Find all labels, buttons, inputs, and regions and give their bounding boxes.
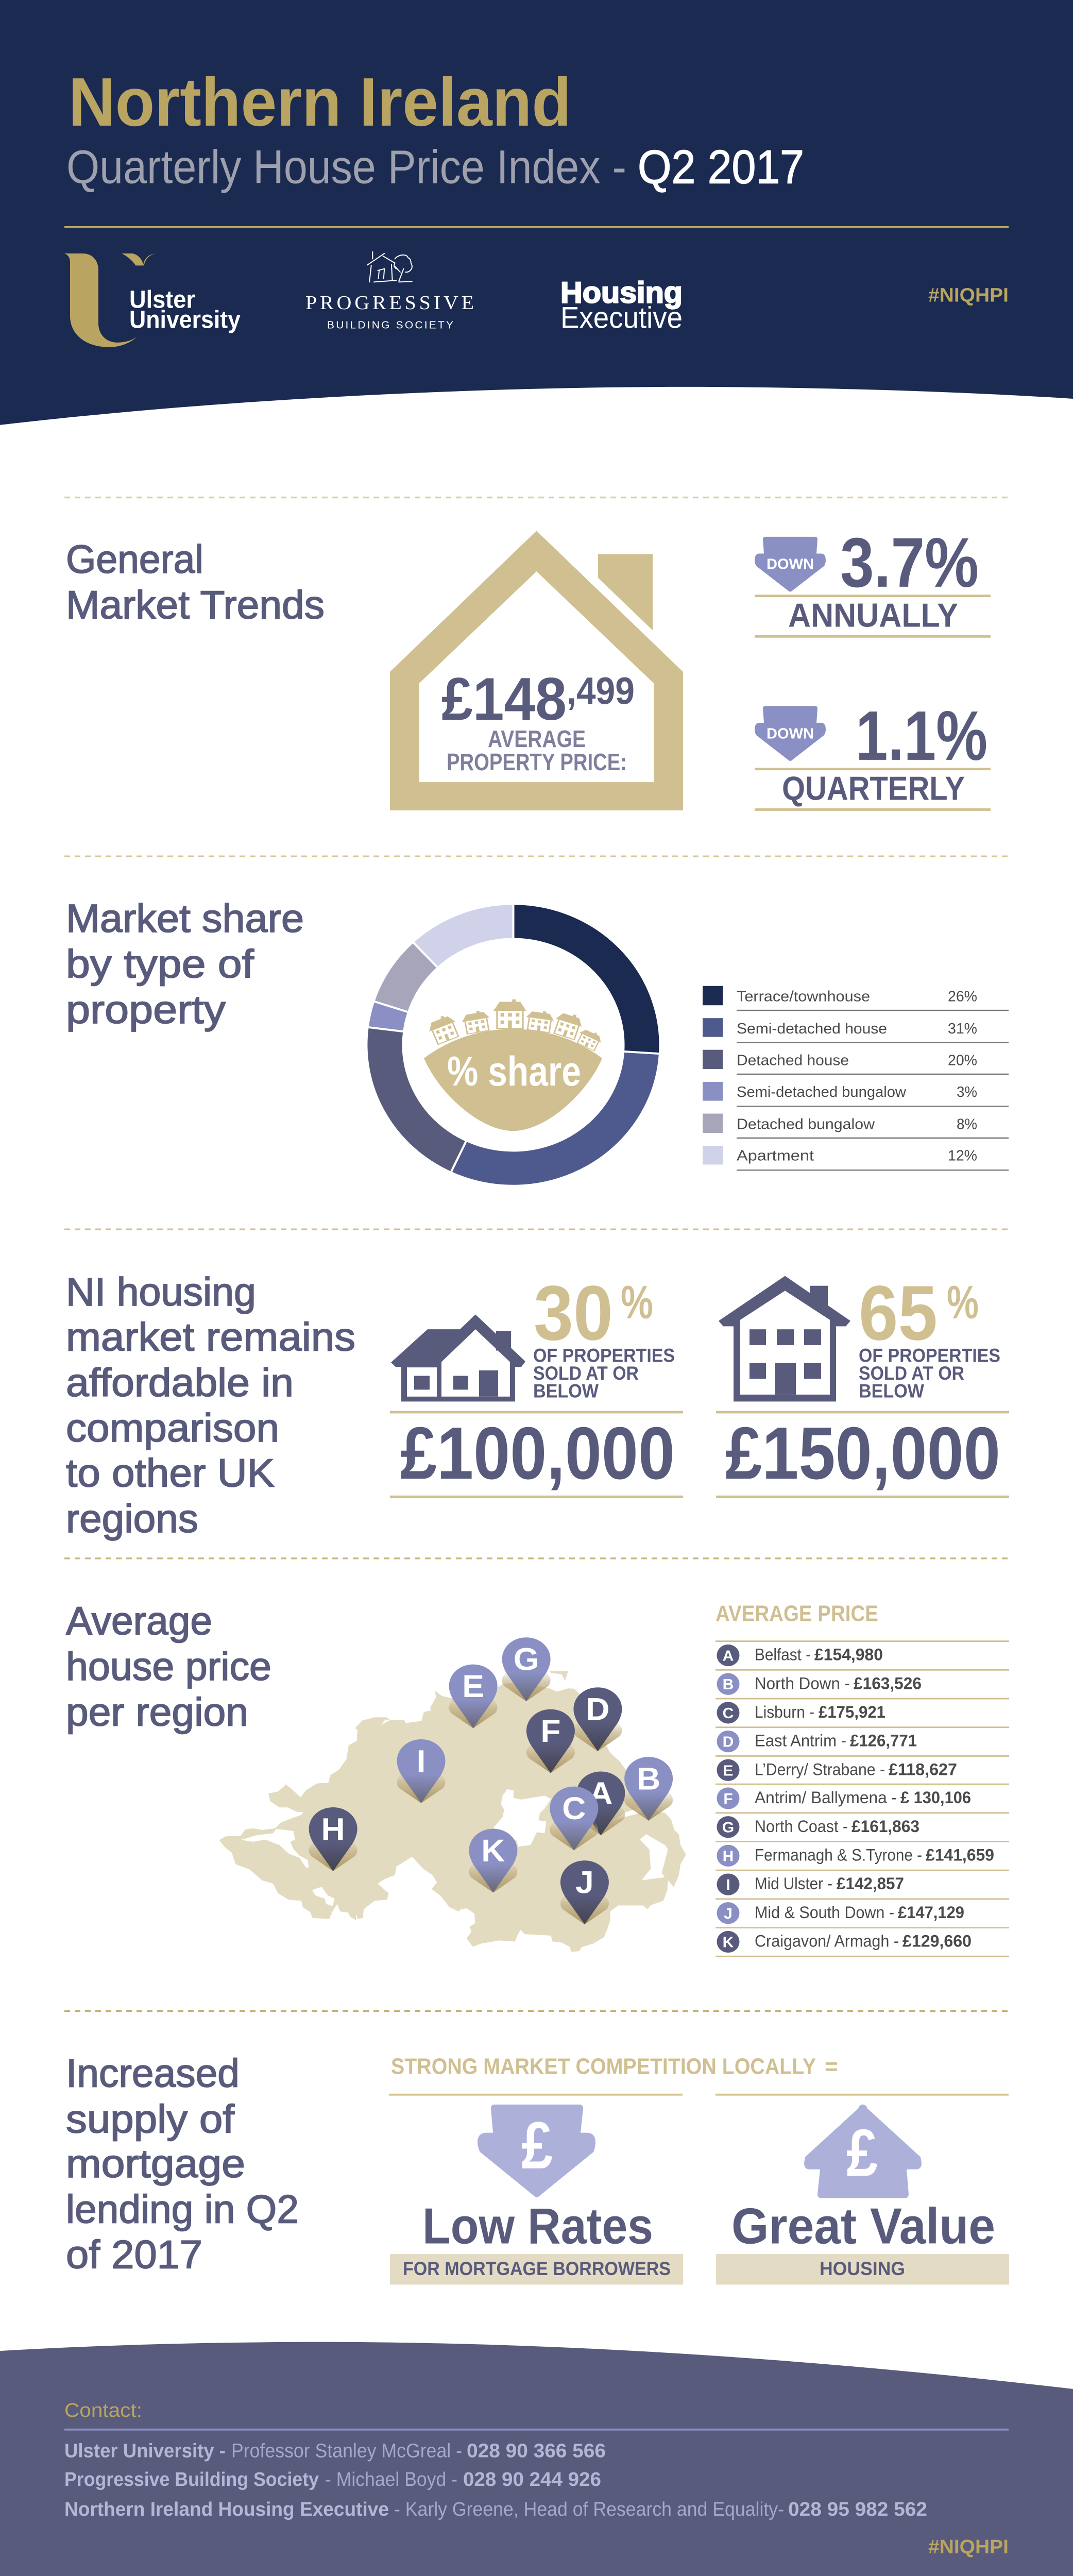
heading: house price: [66, 1644, 271, 1689]
heading: NI housing: [66, 1270, 256, 1314]
heading: [66, 896, 304, 1031]
quarterly change: 1.1%: [856, 697, 987, 775]
row: D East Antrim: East Antrim -: [755, 1732, 846, 1751]
logo: Housing Executive: Housing: [560, 277, 683, 309]
heading: [66, 1270, 355, 1541]
map pin: D: D: [586, 1692, 610, 1727]
great value: HOUSING: [820, 2258, 905, 2280]
logo: Ulster University: Ulster: [129, 286, 195, 313]
map pin: C: [550, 1787, 598, 1851]
row: A Belfast: A: [723, 1648, 734, 1664]
logo: Housing Executive: Executive: [560, 301, 683, 334]
heading: [66, 1599, 271, 1734]
heading: per region: [66, 1690, 248, 1734]
heading: lending in Q2: [66, 2187, 299, 2231]
row: H Fermanagh: £141,659: [926, 1846, 994, 1865]
map pin: H: [309, 1807, 357, 1871]
row: G North Coast: North Coast -: [755, 1817, 848, 1836]
map pin: G: G: [514, 1642, 539, 1677]
logo: Progressive Building Society: PROGRESSIVE: [305, 292, 474, 314]
footer panel: [0, 2342, 1073, 2576]
row: J Mid and South Down: £147,129: [898, 1903, 964, 1922]
price list: [716, 1602, 1009, 1957]
heading: Market Trends: [66, 583, 325, 627]
quarterly change: [755, 697, 991, 811]
row: I Mid Ulster: [717, 1873, 904, 1895]
title: Northern Ireland: [69, 63, 571, 140]
subtitle: Quarterly House Price Index -: [66, 140, 626, 193]
map pin: D: [573, 1687, 622, 1751]
heading: regions: [66, 1496, 198, 1541]
great value: Great Value: [731, 2198, 995, 2255]
row: C Lisburn: £175,921: [819, 1703, 885, 1722]
contact: Northern Ireland Housing Executive: [64, 2499, 927, 2520]
heading: property: [66, 987, 226, 1031]
legend: 3%: [957, 1083, 977, 1100]
icon: down arrow: DOWN: [767, 725, 814, 742]
logo: Progressive Building Society: BUILDING SOCIETY: [327, 319, 453, 331]
row: D East Antrim: [717, 1731, 917, 1752]
icon: down arrow: [755, 537, 826, 591]
row: B North Down: North Down -: [755, 1674, 850, 1693]
heading: mortgage: [66, 2141, 245, 2186]
heading: affordable in: [66, 1360, 294, 1404]
row: B North Down: [717, 1673, 922, 1695]
contact: Progressive Building Society: 028 90 244 926: [463, 2469, 601, 2490]
logo: Ulster University: University: [129, 307, 241, 333]
stat: 65% at £150,000: %: [947, 1276, 979, 1329]
stat: 30% at £100,000: OF PROPERTIES: [533, 1345, 675, 1366]
map pin: B: B: [637, 1761, 660, 1797]
row: E L'Derry Strabane: £118,627: [889, 1760, 957, 1779]
row: B North Down: B: [723, 1676, 734, 1693]
low rates: Low Rates: [422, 2198, 653, 2255]
panel: general market trends: [66, 523, 991, 811]
row: I Mid Ulster: £142,857: [837, 1875, 904, 1893]
stat: 65% at £150,000: [716, 1269, 1009, 1498]
stat: 65% at £150,000: BELOW: [859, 1380, 925, 1402]
row: A Belfast: £154,980: [814, 1646, 883, 1664]
icon: up arrow with pound: £: [846, 2116, 878, 2191]
contact: Northern Ireland Housing Executive: Northern Ireland Housing Executive: [64, 2499, 389, 2520]
row: K Craigavon Armagh: [717, 1931, 972, 1953]
heading: market remains: [66, 1315, 355, 1359]
heading: to other UK: [66, 1451, 275, 1495]
heading: comparison: [66, 1406, 279, 1450]
stat: 30% at £100,000: 30: [534, 1269, 613, 1357]
panel: regional prices: [66, 1599, 1009, 1957]
quarterly change: QUARTERLY: [782, 770, 965, 807]
centre: % share hill with houses: % share: [447, 1048, 581, 1094]
map pin: A: A: [589, 1776, 613, 1811]
icon: house with average price: AVERAGE: [488, 725, 586, 752]
stat: 30% at £100,000: SOLD AT OR: [533, 1363, 639, 1384]
row: H Fermanagh: Fermanagh & S.Tyrone -: [755, 1846, 922, 1865]
map pin: C: C: [562, 1791, 586, 1826]
heading: General: [66, 537, 203, 582]
legend: Semi-detached bungalow: [737, 1083, 907, 1100]
row: G North Coast: G: [722, 1819, 734, 1836]
row: F Antrim Ballymena: Antrim/ Ballymena -: [755, 1789, 897, 1807]
contact: Progressive Building Society: - Michael Boyd -: [325, 2469, 457, 2490]
heading: supply of: [66, 2097, 234, 2141]
heading: Average: [66, 1599, 212, 1643]
row: J Mid and South Down: [717, 1902, 964, 1924]
footer background with curved edge: [0, 2342, 1073, 2576]
stat: 30% at £100,000: [390, 1269, 683, 1498]
stat: 30% at £100,000: %: [621, 1276, 653, 1329]
stat: 65% at £150,000: OF PROPERTIES: [859, 1345, 1000, 1366]
panel: affordability: [66, 1269, 1009, 1541]
header panel: [0, 0, 1073, 425]
icon: two-storey house: [719, 1276, 850, 1401]
map pin: I: [397, 1739, 445, 1803]
contact: Ulster University: [64, 2440, 606, 2462]
contact: Ulster University: Ulster University -: [64, 2440, 226, 2462]
row: F Antrim Ballymena: £ 130,106: [900, 1789, 971, 1807]
contact: Northern Ireland Housing Executive: 028 95 982 562: [788, 2499, 927, 2520]
stat: 30% at £100,000: BELOW: [533, 1380, 599, 1402]
heading: [66, 2051, 299, 2277]
icon: down arrow with pound: [478, 2105, 595, 2197]
row: E L'Derry Strabane: E: [723, 1762, 734, 1779]
row: A Belfast: [717, 1645, 883, 1666]
map pin: G: [502, 1637, 551, 1701]
legend: Semi-detached house: [737, 1020, 887, 1037]
contact: Progressive Building Society: Progressive Building Society: [64, 2469, 319, 2490]
row: E L'Derry Strabane: L’Derry/ Strabane -: [755, 1760, 885, 1779]
row: K Craigavon Armagh: K: [723, 1934, 734, 1951]
logo: Progressive Building Society: [305, 252, 474, 331]
subheading: =: [825, 2054, 838, 2079]
icon: house with average price: [390, 531, 683, 810]
heading: Increased: [66, 2051, 240, 2095]
row: C Lisburn: Lisburn -: [755, 1703, 814, 1722]
icon: house with average price: £148: [441, 666, 567, 733]
row: J Mid and South Down: J: [724, 1905, 733, 1922]
annual change: [755, 523, 991, 638]
centre: % share hill with houses: [424, 999, 604, 1131]
annual change: 3.7%: [840, 523, 979, 602]
contact: Northern Ireland Housing Executive: - Karly Greene, Head of Research and Equality-: [394, 2499, 784, 2520]
stat: 65% at £150,000: SOLD AT OR: [859, 1363, 964, 1384]
map: Northern Ireland: [219, 1671, 686, 1952]
row: C Lisburn: [717, 1702, 885, 1723]
row: B North Down: £163,526: [854, 1674, 922, 1693]
legend: 20%: [948, 1052, 977, 1069]
legend: 26%: [948, 988, 977, 1005]
heading: by type of: [66, 942, 254, 986]
heading: of 2017: [66, 2232, 202, 2277]
icon: down arrow with pound: £: [521, 2108, 553, 2183]
row: G North Coast: [717, 1816, 919, 1838]
stat: 30% at £100,000: £100,000: [400, 1412, 675, 1495]
legend: Detached house: [737, 1052, 849, 1069]
map pin: E: [449, 1665, 498, 1728]
icon: down arrow: [755, 706, 826, 761]
map pin: K: K: [481, 1833, 505, 1869]
map pin: F: [526, 1709, 575, 1773]
panel: mortgage lending: [66, 2051, 1009, 2284]
stat: 65% at £150,000: 65: [859, 1269, 938, 1357]
row: J Mid and South Down: Mid & South Down -: [755, 1903, 894, 1922]
heading: [66, 537, 325, 627]
logo: Housing Executive: [560, 277, 683, 334]
contact heading: Contact:: [64, 2399, 142, 2421]
row: I Mid Ulster: Mid Ulster -: [755, 1875, 832, 1893]
legend: Terrace/townhouse: [737, 988, 870, 1005]
row: E L'Derry Strabane: [717, 1759, 957, 1781]
row: F Antrim Ballymena: [717, 1787, 971, 1809]
map pin: I: I: [417, 1744, 425, 1779]
low rates: FOR MORTGAGE BORROWERS: [403, 2258, 671, 2280]
legend: Detached bungalow: [737, 1116, 875, 1132]
row: A Belfast: Belfast -: [755, 1646, 811, 1664]
row: H Fermanagh: [717, 1845, 994, 1867]
subheading: STRONG MARKET COMPETITION LOCALLY: [391, 2054, 816, 2079]
contact: Progressive Building Society: [64, 2469, 601, 2490]
legend: [703, 986, 1009, 1171]
contact: Ulster University: Professor Stanley McGreal -: [231, 2440, 462, 2462]
row: K Craigavon Armagh: Craigavon/ Armagh -: [755, 1932, 899, 1951]
low rates: [390, 2105, 683, 2284]
legend: 31%: [948, 1020, 977, 1037]
row: D East Antrim: £126,771: [850, 1732, 917, 1751]
row: K Craigavon Armagh: £129,660: [902, 1932, 972, 1951]
icon: house with average price: PROPERTY PRICE:: [447, 749, 627, 775]
header background with curved edge: [0, 0, 1073, 425]
panel: market share: [66, 896, 1009, 1186]
logo: Ulster University: [64, 253, 241, 347]
icon: bungalow house: [391, 1314, 525, 1401]
stat: 65% at £150,000: £150,000: [725, 1412, 1000, 1495]
map pin: H: H: [321, 1811, 345, 1847]
subtitle: Q2 2017: [638, 140, 804, 193]
list heading: AVERAGE PRICE: [716, 1602, 878, 1626]
row: I Mid Ulster: I: [726, 1877, 730, 1893]
map pin: E: E: [462, 1669, 484, 1704]
map pin: J: J: [575, 1865, 594, 1900]
icon: up arrow with pound: [804, 2105, 922, 2198]
row: H Fermanagh: H: [723, 1848, 734, 1865]
legend: 12%: [948, 1147, 977, 1164]
contact: Ulster University: 028 90 366 566: [467, 2440, 606, 2462]
row: F Antrim Ballymena: F: [723, 1791, 733, 1807]
heading: Market share: [66, 896, 304, 941]
map pin: K: [469, 1829, 517, 1893]
row: G North Coast: £161,863: [851, 1817, 919, 1836]
map pin: F: F: [540, 1714, 560, 1749]
hashtag: #NIQHPI: [928, 284, 1009, 307]
legend: Apartment: [737, 1147, 814, 1164]
annual change: ANNUALLY: [788, 597, 958, 634]
map pin: A: [576, 1771, 625, 1835]
map pin: B: [624, 1757, 673, 1821]
icon: house with average price: ,499: [567, 670, 635, 712]
legend: 8%: [957, 1116, 977, 1132]
donut chart: [366, 904, 660, 1186]
map pin: J: [560, 1860, 609, 1924]
row: C Lisburn: C: [723, 1705, 734, 1722]
row: D East Antrim: D: [723, 1734, 734, 1750]
hashtag: #NIQHPI: [928, 2536, 1009, 2558]
icon: down arrow: DOWN: [767, 556, 814, 572]
great value: [716, 2105, 1009, 2284]
